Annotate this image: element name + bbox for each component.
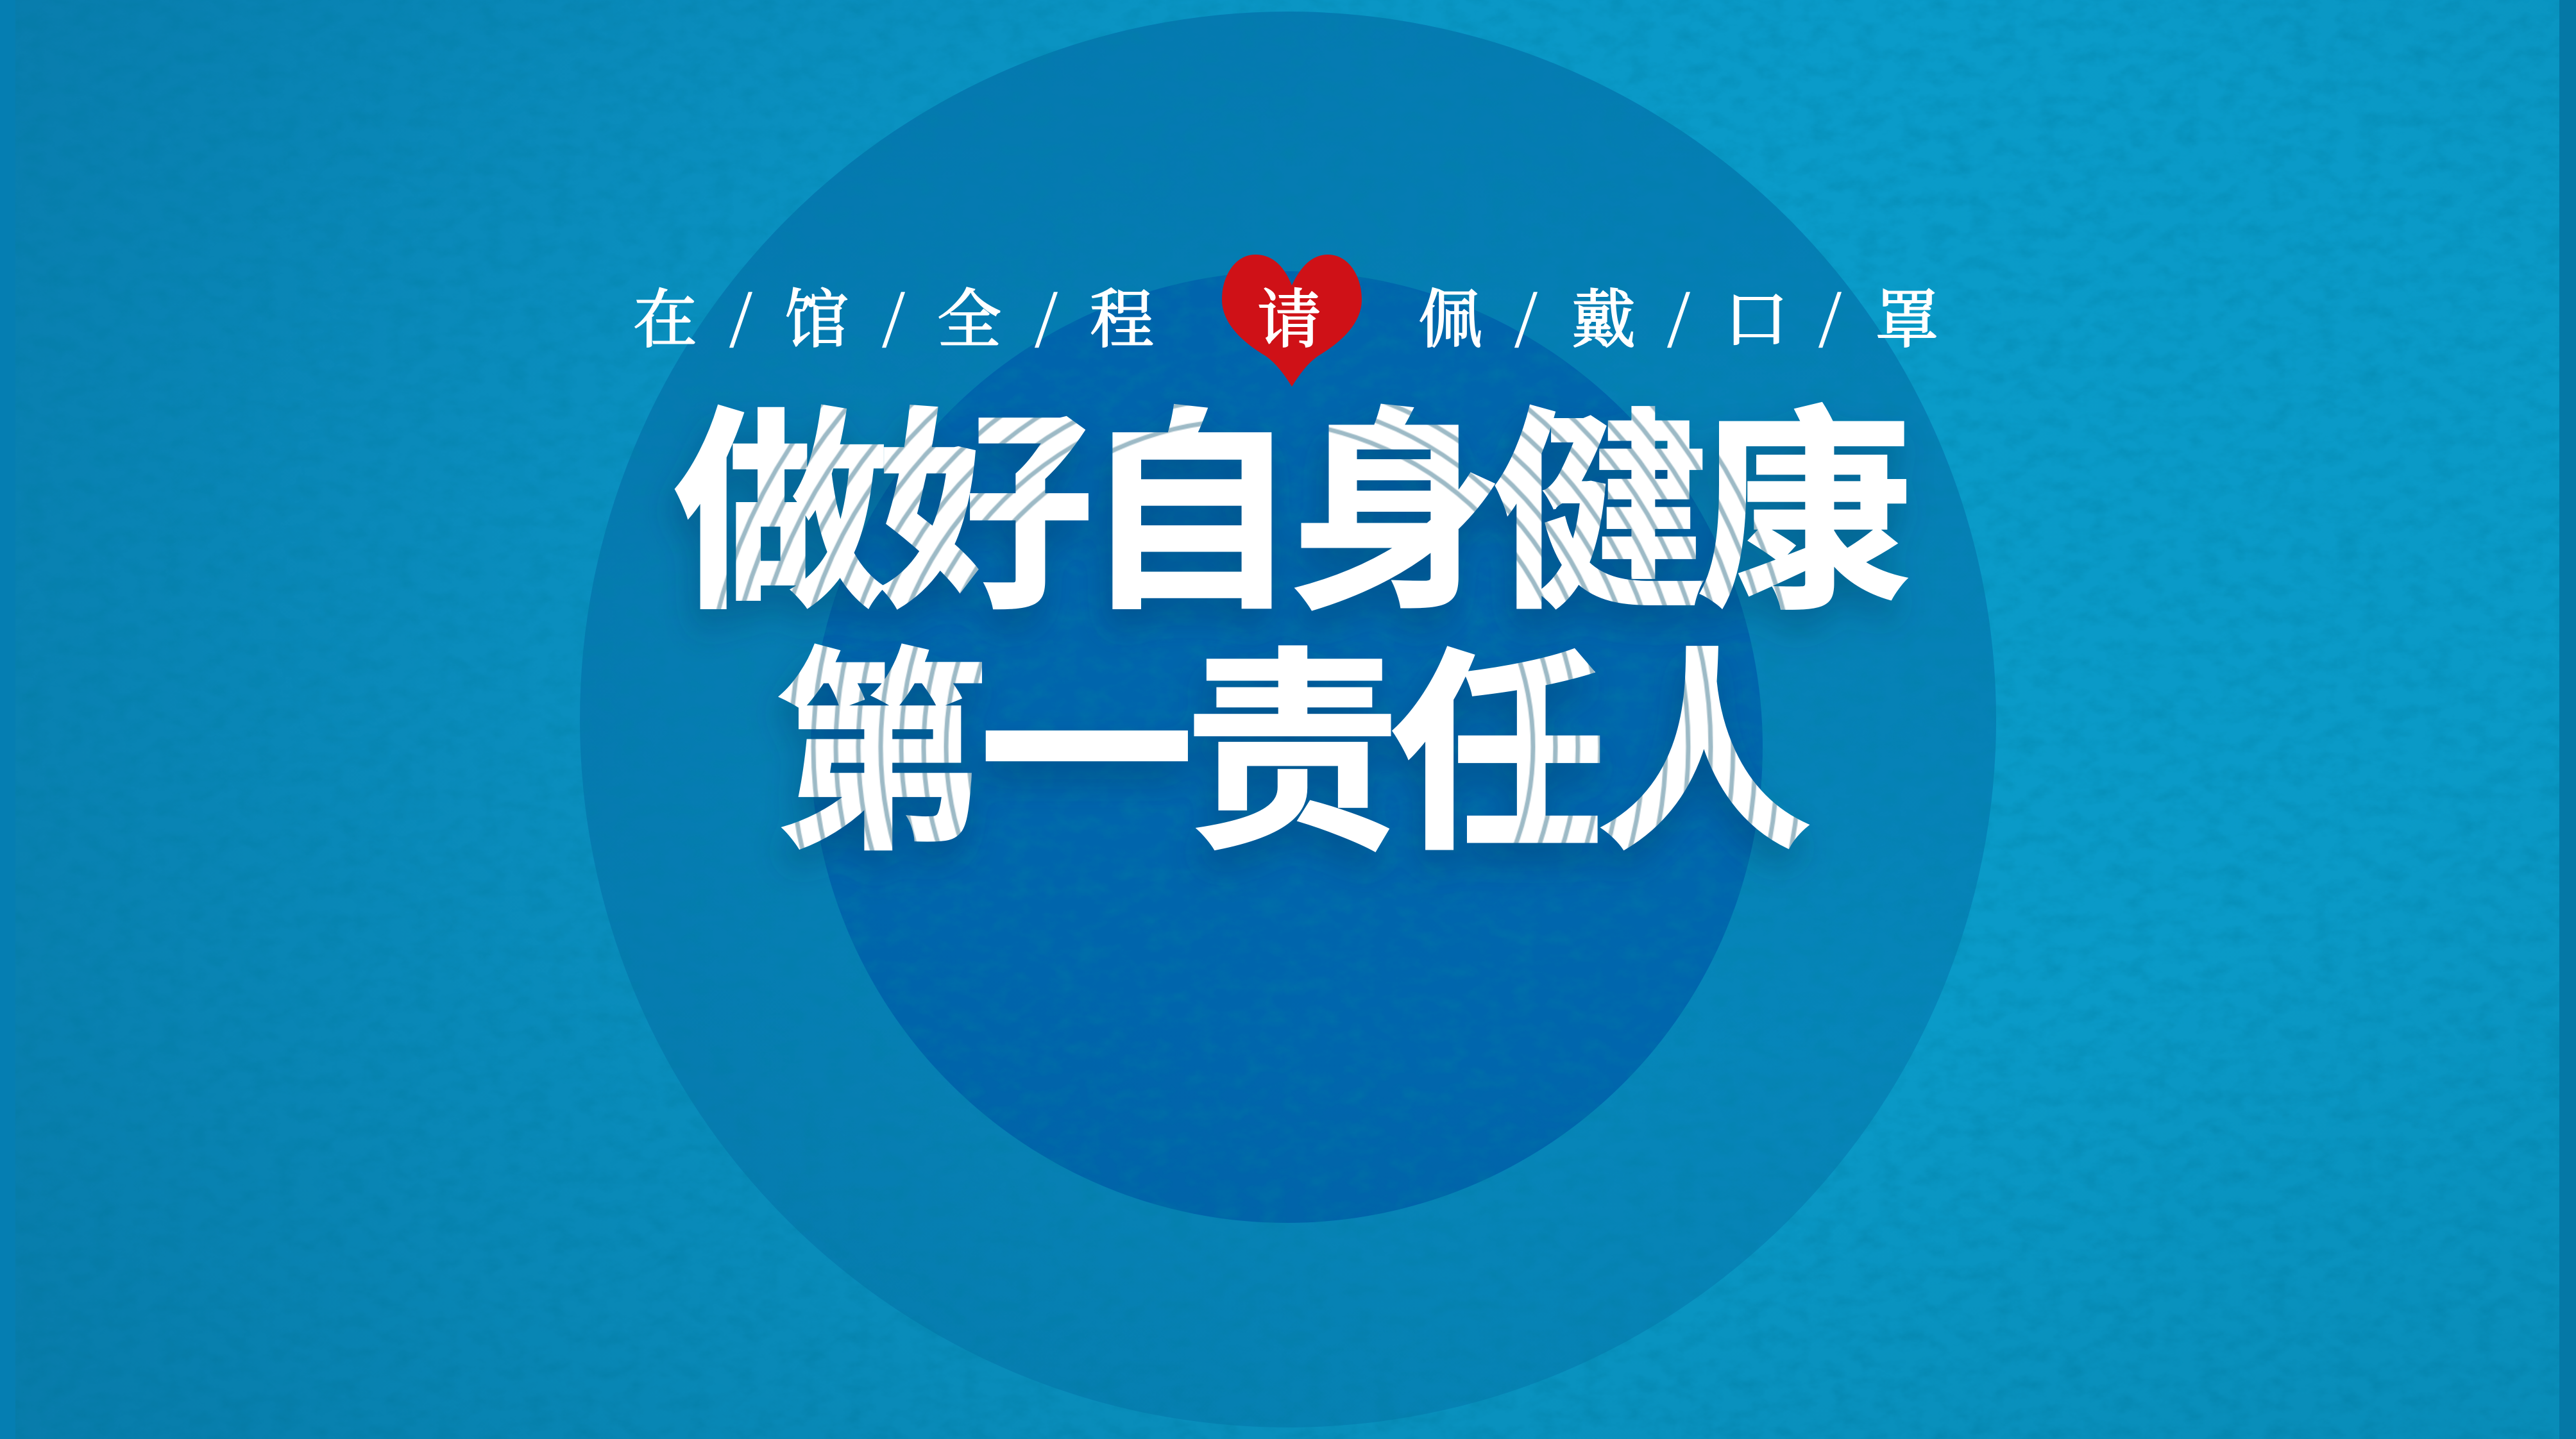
outer circle <box>580 12 1996 1427</box>
subtitle right: 佩戴口罩: 佩戴口罩 <box>1418 285 1939 356</box>
right edge strip <box>2559 0 2576 1439</box>
heading line 1: 做好自身健康 <box>674 394 1912 635</box>
left edge strip <box>0 0 15 1439</box>
heading line 2: 第一责任人 <box>773 635 1812 876</box>
icon: red heart with 请: 请 <box>1257 285 1321 356</box>
inner circle <box>811 271 1763 1223</box>
subtitle left: 在馆全程: 在馆全程 <box>633 285 1154 356</box>
subtitle right: 佩戴口罩: /// <box>1514 273 1842 366</box>
icon: red heart with 请 <box>1222 255 1362 387</box>
subtitle left: 在馆全程: /// <box>729 273 1058 366</box>
